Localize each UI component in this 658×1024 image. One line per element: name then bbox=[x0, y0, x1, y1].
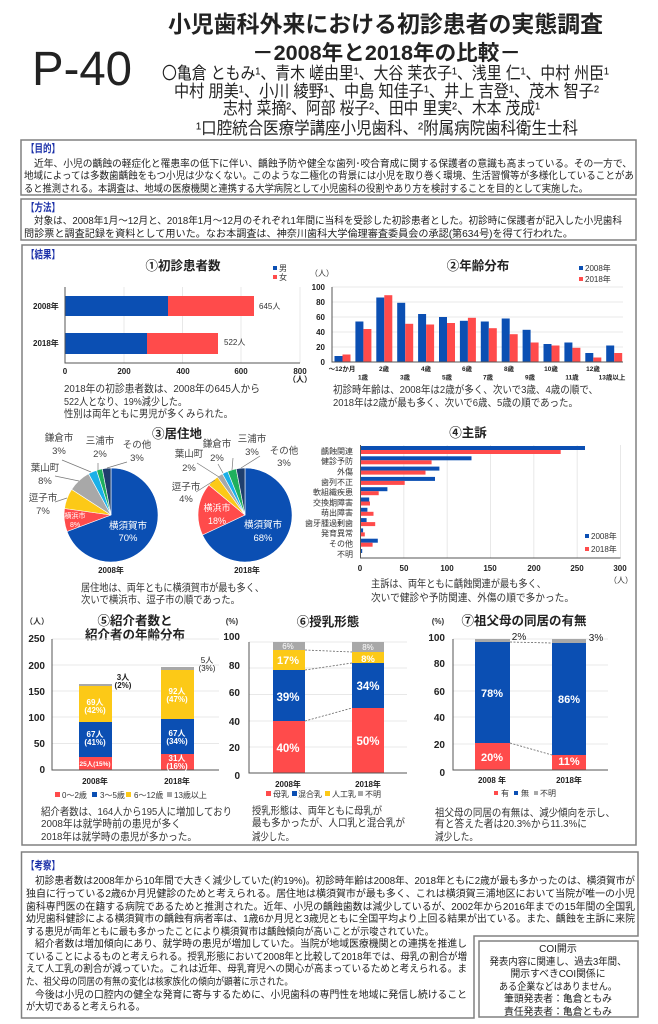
chart 4: chief complaint: 交換期障害 bbox=[313, 498, 353, 508]
chart 5: referrals: 2008年は就学時前の患児が多く bbox=[41, 817, 181, 830]
pie: 2018: 三浦市 bbox=[238, 433, 267, 445]
chart 2: age distribution: 2018年は2歳が最も多く、次いで6歳、5歳の順であった。 bbox=[333, 396, 578, 409]
chart 5: referrals: 紹介者の年齢分布 bbox=[85, 627, 185, 642]
authors and affiliations: 〇亀倉 ともみ¹、青木 嵯由里¹、大谷 茉衣子¹、浅里 仁¹、中村 州臣¹ bbox=[162, 64, 609, 83]
chart 7: living with grandparents: 減少した。 bbox=[435, 830, 478, 843]
panel: discussion: 紹介者数は増加傾向にあり、就学時の患児が増加していた。当院が地域医療機関との連携を推進し bbox=[35, 937, 467, 950]
chart 5: referrals: 150 bbox=[28, 687, 45, 698]
chart 7: living with grandparents: 2008 年 bbox=[478, 775, 506, 785]
chart 1: number of first-visit patients: （人） bbox=[288, 375, 312, 384]
chart 7: living with grandparents: 20% bbox=[481, 752, 503, 764]
chart 5: referrals: 31人 bbox=[169, 754, 185, 763]
chart 2: age distribution: 100 bbox=[312, 283, 326, 292]
chart 4: chief complaint: 歯列不正 bbox=[321, 477, 353, 487]
chart 6: feeding type: (%) bbox=[226, 617, 239, 626]
chart 2: age distribution: 2歳 bbox=[379, 364, 390, 373]
chart 4: chief complaint: 次いで健診や予防関連、外傷の順で多かった。 bbox=[371, 591, 574, 604]
pie: 2008: 2% bbox=[93, 449, 107, 460]
pie: 2008: 逗子市 bbox=[29, 492, 58, 504]
panel: purpose: 【目的】 bbox=[26, 141, 60, 155]
chart 7: living with grandparents: 不明 bbox=[540, 789, 556, 798]
pie: 2008: 葉山町 bbox=[31, 462, 60, 474]
chart 5: referrals: (41%) bbox=[84, 738, 106, 747]
chart 7: living with grandparents bbox=[428, 613, 615, 843]
chart 4: chief complaint: その他 bbox=[329, 538, 353, 548]
chart 3: residence pies: 次いで横浜市、逗子市の順であった。 bbox=[81, 593, 240, 606]
chart 1: number of first-visit patients: 600 bbox=[234, 367, 248, 376]
chart 2: age distribution: 8歳 bbox=[504, 364, 515, 373]
pie: 2008: 8% bbox=[38, 476, 52, 487]
pie: 2018 bbox=[172, 433, 299, 575]
chart 6: feeding type: 60 bbox=[229, 688, 240, 699]
pie: 2008: 2008年 bbox=[98, 565, 124, 575]
chart 6: feeding type: 17% bbox=[277, 655, 299, 667]
chart 2: age distribution: 1歳 bbox=[358, 372, 369, 382]
chart 6: feeding type: 最も多かったが、人口乳と混合乳が bbox=[252, 816, 405, 829]
chart 5: referrals: (2%) bbox=[115, 681, 132, 690]
chart 5: referrals: 6～12歳 bbox=[134, 790, 163, 800]
chart 5: referrals: 5人 bbox=[201, 656, 213, 665]
panel: discussion: 初診患者数は2008年から10年間で大きく減少していた(約19%)。初診時年齢は2008年、2018年ともに2歳が最も多かったのは、横須賀市が bbox=[35, 874, 635, 887]
chart 6: feeding type bbox=[223, 614, 407, 843]
chart 2: age distribution: 3歳 bbox=[400, 372, 411, 382]
chart 1: number of first-visit patients: ①初診患者数 bbox=[145, 258, 221, 273]
pie: 2018: 2% bbox=[182, 463, 196, 474]
chart 2: age distribution: 11歳 bbox=[565, 372, 579, 382]
chart 5: referrals: 200 bbox=[28, 661, 45, 672]
chart 5: referrals: 0～2歳 bbox=[62, 790, 87, 800]
authors and affiliations bbox=[162, 64, 609, 138]
chart 2: age distribution: （人） bbox=[310, 269, 334, 278]
chart 5: referrals: 67人 bbox=[169, 729, 185, 738]
pie: 2008: 鎌倉市 bbox=[45, 432, 74, 444]
chart 7: living with grandparents: 有 bbox=[501, 788, 509, 798]
chart 7: living with grandparents: 40 bbox=[434, 713, 445, 724]
chart 1: number of first-visit patients: 2018年の初診患者数は、2008年の645人から bbox=[64, 382, 260, 395]
chart 1: number of first-visit patients: 女 bbox=[279, 272, 287, 282]
chart 7: living with grandparents: 60 bbox=[434, 687, 445, 698]
chart 4: chief complaint: 健診予防 bbox=[321, 456, 353, 466]
chart 5: referrals: (16%) bbox=[166, 762, 188, 771]
panel: discussion: が大切であると考えられる。 bbox=[26, 1000, 145, 1013]
panel: methods: 問診票と調査記録を資料として用いた。なお本調査は、神奈川歯科大学倫理審査委員会の承認(第634号)を得て行われた。 bbox=[24, 227, 573, 240]
chart 2: age distribution: 7歳 bbox=[483, 372, 494, 382]
chart 4: chief complaint: 発育異常 bbox=[321, 528, 353, 538]
chart 2: age distribution: 6歳 bbox=[462, 364, 473, 373]
chart 7: living with grandparents: ⑦祖父母の同居の有無 bbox=[461, 613, 587, 628]
chart 2: age distribution: 9歳 bbox=[525, 372, 536, 382]
chart 2: age distribution: 0 bbox=[321, 358, 326, 367]
authors and affiliations: 志村 菜摘²、阿部 桜子²、田中 里実²、木本 茂成¹ bbox=[223, 99, 540, 118]
chart 2: age distribution: 60 bbox=[316, 313, 326, 322]
chart 7: living with grandparents: 2018年 bbox=[556, 775, 582, 785]
chart 4: chief complaint: 歯牙腫過剰歯 bbox=[305, 518, 353, 528]
chart 6: feeding type: ⑥授乳形態 bbox=[297, 614, 360, 629]
chart 1: number of first-visit patients: 400 bbox=[176, 367, 190, 376]
chart 1: number of first-visit patients: 522人となり、19%減少した。 bbox=[64, 395, 187, 408]
chart 3: residence pies: ③居住地 bbox=[152, 426, 202, 441]
chart 7: living with grandparents: 80 bbox=[434, 659, 445, 670]
chart 5: referrals: 3人 bbox=[117, 673, 129, 682]
chart 6: feeding type: 減少した。 bbox=[252, 830, 294, 843]
pie: 2018: その他 bbox=[270, 445, 299, 457]
panel: methods: 対象は、2008年1月～12月と、2018年1月～12月のそれぞれ1年間に当科を受診した初診患者とした。初診時に保護者が記入した小児歯科 bbox=[34, 214, 622, 227]
chart 2: age distribution: 40 bbox=[316, 328, 326, 337]
chart 6: feeding type: 8% bbox=[361, 654, 375, 665]
chart 6: feeding type: 40 bbox=[229, 717, 240, 728]
chart 6: feeding type: 6% bbox=[282, 642, 294, 651]
chart 4: chief complaint: 軟組織疾患 bbox=[313, 487, 353, 497]
chart 2: age distribution: 20 bbox=[316, 343, 326, 352]
pie: 2008: その他 bbox=[123, 439, 152, 451]
chart 5: referrals: (47%) bbox=[166, 695, 188, 704]
chart 6: feeding type: 34% bbox=[356, 681, 380, 693]
poster number: P-40 bbox=[32, 43, 132, 96]
chart 7: living with grandparents: 3% bbox=[589, 633, 603, 644]
chart 7: living with grandparents: 11% bbox=[558, 756, 580, 768]
pie: 2018: 鎌倉市 bbox=[203, 438, 232, 450]
panel: discussion: ていることによるものと考えられる。授乳形態において2008年と比較して2018年では、母乳の割合が増 bbox=[26, 950, 467, 963]
chart 5: referrals: 3～5歳 bbox=[100, 790, 125, 800]
pie: 2018: 4% bbox=[179, 494, 193, 505]
chart 5: referrals: 100 bbox=[28, 713, 45, 724]
pie: 2008: 70% bbox=[118, 533, 138, 544]
chart 7: living with grandparents: 78% bbox=[481, 688, 503, 700]
chart 7: living with grandparents: 2% bbox=[512, 632, 526, 643]
chart 6: feeding type: 授乳形態は、両年ともに母乳が bbox=[252, 804, 382, 817]
panel: COI disclosure: ある企業などはありません。 bbox=[499, 980, 617, 993]
chart 6: feeding type: 人工乳 bbox=[332, 789, 356, 799]
chart 5: referrals: 0 bbox=[39, 765, 45, 776]
chart 1: number of first-visit patients: 2008年 bbox=[33, 301, 59, 311]
chart 7: living with grandparents: 祖父母の同居の有無は、減少傾向を示し、 bbox=[435, 806, 615, 819]
chart 4: chief complaint: （人） bbox=[609, 576, 633, 585]
panel: COI disclosure: 責任発表者：亀倉ともみ bbox=[504, 1005, 612, 1018]
panel: discussion: 独自に行っている2歳6か月児健診のためと考えられる。居住地は横須賀市が最も多く、これは横須賀三浦地区において当院が唯一の小児 bbox=[26, 887, 635, 900]
chart 1: number of first-visit patients: 男 bbox=[279, 264, 287, 273]
chart 2: age distribution: ～12か月 bbox=[329, 365, 355, 373]
chart 6: feeding type: 2018年 bbox=[355, 779, 381, 789]
pie: 2008: 7% bbox=[36, 506, 50, 517]
panel: discussion: えて人工乳の割合が減っていた。これは近年、母乳育児への関心が高まっているためと考えられる。ま bbox=[26, 962, 467, 975]
chart 5: referrals: 25人(15%) bbox=[79, 761, 111, 768]
pie: 2018: 3% bbox=[277, 458, 291, 469]
pie: 2018: 2018年 bbox=[234, 565, 260, 575]
pie: 2008 bbox=[29, 432, 158, 575]
chart 4: chief complaint: 2008年 bbox=[591, 531, 617, 541]
chart 1: number of first-visit patients: 800 bbox=[293, 367, 307, 376]
chart 4: chief complaint: 200 bbox=[527, 564, 541, 573]
panel: discussion bbox=[22, 852, 638, 1018]
chart 4: chief complaint: 100 bbox=[440, 564, 454, 573]
chart 5: referrals: (3%) bbox=[199, 664, 216, 673]
chart 5: referrals: 13歳以上 bbox=[174, 790, 207, 800]
chart 5: referrals: 67人 bbox=[87, 730, 103, 739]
chart 4: chief complaint: 250 bbox=[570, 564, 584, 573]
chart 4: chief complaint: 萌出障害 bbox=[321, 508, 353, 518]
results heading: 【結果】 bbox=[26, 247, 60, 261]
panel: purpose: 地域によっては多数歯齲蝕をもつ小児は少なくない。このような二極化の背景には小児を取り巻く環境、生活習慣等が多様化していることがあ bbox=[24, 169, 634, 182]
pie: 2018: 逗子市 bbox=[172, 481, 201, 493]
chart 5: referrals: 92人 bbox=[169, 687, 185, 696]
chart 4: chief complaint: 齲蝕関連 bbox=[321, 446, 353, 456]
chart 3: residence pies bbox=[29, 426, 299, 606]
chart 7: living with grandparents: 無 bbox=[521, 788, 529, 798]
chart 4: chief complaint: 50 bbox=[400, 564, 409, 573]
chart 2: age distribution: 2018年 bbox=[585, 274, 611, 284]
panel: results bbox=[22, 245, 636, 845]
panel: COI disclosure: COI開示 bbox=[539, 943, 577, 955]
pie: 2008: 横須賀市 bbox=[109, 520, 147, 532]
pie: 2008: 三浦市 bbox=[86, 435, 115, 447]
authors and affiliations: ¹口腔統合医療学講座小児歯科、²附属病院歯科衛生士科 bbox=[196, 119, 578, 138]
chart 7: living with grandparents: 86% bbox=[558, 694, 580, 706]
chart 6: feeding type: 8% bbox=[362, 643, 374, 652]
panel: purpose: ると推測される。本調査は、地域の医療機関と連携する大学病院として小児歯科の役割やあり方を検討することを目的として実施した。 bbox=[24, 182, 588, 195]
chart 5: referrals: ⑤紹介者数と bbox=[97, 613, 173, 628]
pie: 2008: 横浜市 bbox=[64, 511, 86, 520]
chart 1: number of first-visit patients bbox=[33, 258, 312, 420]
chart 5: referrals: 50 bbox=[34, 739, 45, 750]
chart 6: feeding type: 20 bbox=[229, 743, 240, 754]
chart 6: feeding type: 40% bbox=[276, 743, 300, 755]
chart 5: referrals bbox=[25, 613, 232, 843]
chart 6: feeding type: 80 bbox=[229, 661, 240, 672]
chart 2: age distribution: 10歳 bbox=[544, 364, 558, 373]
chart 7: living with grandparents: (%) bbox=[432, 617, 445, 626]
chart 5: referrals: 69人 bbox=[87, 698, 103, 707]
pie: 2018: 3% bbox=[245, 447, 259, 458]
chart 3: residence pies: 居住地は、両年ともに横須賀市が最も多く、 bbox=[81, 581, 264, 594]
chart 6: feeding type: 2008年 bbox=[275, 779, 301, 789]
chart 5: referrals: 2008年 bbox=[82, 776, 108, 786]
pie: 2018: 18% bbox=[208, 516, 226, 526]
chart 4: chief complaint: 外傷 bbox=[337, 466, 353, 476]
chart 4: chief complaint bbox=[305, 425, 633, 604]
chart 6: feeding type: 0 bbox=[234, 771, 240, 782]
pie: 2018: 2% bbox=[210, 453, 224, 464]
panel: discussion: 今後は小児の口腔内の健全な発育に寄与するために、小児歯科の専門性を地域に発信し続けること bbox=[35, 988, 467, 1001]
panel: discussion: する患児が両年ともに最も多かったことにより横須賀市は齲蝕傾向が高いことが示唆されていた。 bbox=[26, 925, 434, 938]
chart 6: feeding type: 39% bbox=[276, 692, 300, 704]
chart 2: age distribution: 12歳 bbox=[586, 364, 600, 373]
panel: COI disclosure: 発表内容に関連し、過去3年間、 bbox=[490, 955, 626, 968]
panel: discussion: 【考察】 bbox=[26, 858, 60, 872]
chart 2: age distribution: 5歳 bbox=[442, 372, 453, 382]
chart 6: feeding type: 母乳 bbox=[273, 789, 289, 799]
pie: 2008: 8% bbox=[70, 522, 80, 529]
panel: COI disclosure: 開示すべきCOI関係に bbox=[510, 967, 606, 980]
chart 5: referrals: (42%) bbox=[84, 706, 106, 715]
chart 2: age distribution: 13歳以上 bbox=[599, 372, 626, 382]
pie: 2008: 3% bbox=[52, 446, 66, 457]
panel: methods: 【方法】 bbox=[26, 200, 60, 214]
authors and affiliations: 中村 朋美¹、小川 綾野¹、中島 知佳子¹、井上 吉登¹、茂木 智子² bbox=[174, 82, 599, 101]
chart 2: age distribution: 4歳 bbox=[421, 364, 432, 373]
pie: 2018: 横浜市 bbox=[203, 502, 231, 513]
chart 5: referrals: 250 bbox=[28, 634, 45, 645]
chart 4: chief complaint: 0 bbox=[358, 564, 363, 573]
chart 4: chief complaint: 2018年 bbox=[591, 544, 617, 554]
chart 4: chief complaint: ④主訴 bbox=[449, 425, 487, 440]
panel: discussion: 幼児歯科健診による横須賀市の齲蝕有病者率は、1歳6か月児と3歳児ともに全国平均より上回る結果が出ている。また、齲蝕を主訴に来院 bbox=[26, 912, 635, 925]
chart 4: chief complaint: 不明 bbox=[337, 550, 353, 559]
chart 2: age distribution: 80 bbox=[316, 298, 326, 307]
pie: 2018: 葉山町 bbox=[175, 448, 204, 460]
chart 1: number of first-visit patients: 200 bbox=[117, 367, 131, 376]
chart 5: referrals: 2018年は就学時の患児が多かった。 bbox=[41, 830, 197, 843]
chart 5: referrals: 2018年 bbox=[164, 776, 190, 786]
chart 6: feeding type: 不明 bbox=[365, 790, 381, 799]
panel: methods bbox=[21, 199, 636, 240]
panel: discussion: 歯科専門医の在籍する病院であるためと推測された。近年、小児の齲蝕歯数は減少しているが、2002年から2016年までの15年間の全国乳 bbox=[26, 900, 635, 913]
chart 7: living with grandparents: 100 bbox=[428, 633, 445, 644]
panel: COI disclosure: 筆頭発表者：亀倉ともみ bbox=[504, 992, 612, 1005]
chart 4: chief complaint: 150 bbox=[483, 564, 497, 573]
pie: 2018: 68% bbox=[253, 533, 273, 544]
chart 1: number of first-visit patients: 性別は両年ともに男児が多くみられた。 bbox=[64, 407, 233, 420]
chart 7: living with grandparents: 20 bbox=[434, 740, 445, 751]
panel: purpose bbox=[21, 140, 636, 195]
chart 4: chief complaint: 主訴は、両年ともに齲蝕関連が最も多く、 bbox=[371, 577, 546, 590]
title: 小児歯科外来における初診患者の実態調査 bbox=[168, 11, 603, 37]
chart 2: age distribution: ②年齢分布 bbox=[447, 258, 509, 273]
chart 5: referrals: (34%) bbox=[166, 737, 188, 746]
chart 2: age distribution: 2008年 bbox=[585, 263, 611, 273]
chart 5: referrals: （人） bbox=[25, 617, 49, 626]
chart 1: number of first-visit patients: 2018年 bbox=[33, 338, 59, 348]
panel: purpose: 近年、小児の齲蝕の軽症化と罹患率の低下に伴い、齲蝕予防や健全な歯列･咬合育成に関する保護者の意識も高まっている。その一方で、 bbox=[34, 157, 632, 170]
chart 2: age distribution: 初診時年齢は、2008年は2歳が多く、次いで3歳、4歳の順で、 bbox=[333, 383, 598, 396]
title: －2008年と2018年の比較－ bbox=[252, 42, 521, 65]
chart 5: referrals: 紹介者数は、164人から195人に増加しており bbox=[41, 805, 232, 818]
title bbox=[168, 11, 603, 65]
chart 2: age distribution bbox=[310, 258, 626, 409]
chart 1: number of first-visit patients: 0 bbox=[63, 367, 68, 376]
chart 6: feeding type: 100 bbox=[223, 632, 240, 643]
chart 7: living with grandparents: 有と答えた者は20.3%から11.3%に bbox=[435, 817, 587, 830]
chart 4: chief complaint: 300 bbox=[613, 564, 627, 573]
chart 7: living with grandparents: 0 bbox=[439, 768, 445, 779]
chart 6: feeding type: 混合乳 bbox=[298, 789, 322, 799]
chart 6: feeding type: 50% bbox=[356, 736, 380, 748]
panel: discussion: た、祖父母の同居の有無の変化は核家族化の傾向が顕著に示された。 bbox=[26, 975, 293, 988]
pie: 2018: 横須賀市 bbox=[244, 519, 282, 531]
pie: 2008: 3% bbox=[130, 453, 144, 464]
chart 1: number of first-visit patients: 522人 bbox=[224, 338, 245, 347]
panel: COI disclosure bbox=[479, 941, 638, 1018]
chart 1: number of first-visit patients: 645人 bbox=[259, 302, 280, 311]
